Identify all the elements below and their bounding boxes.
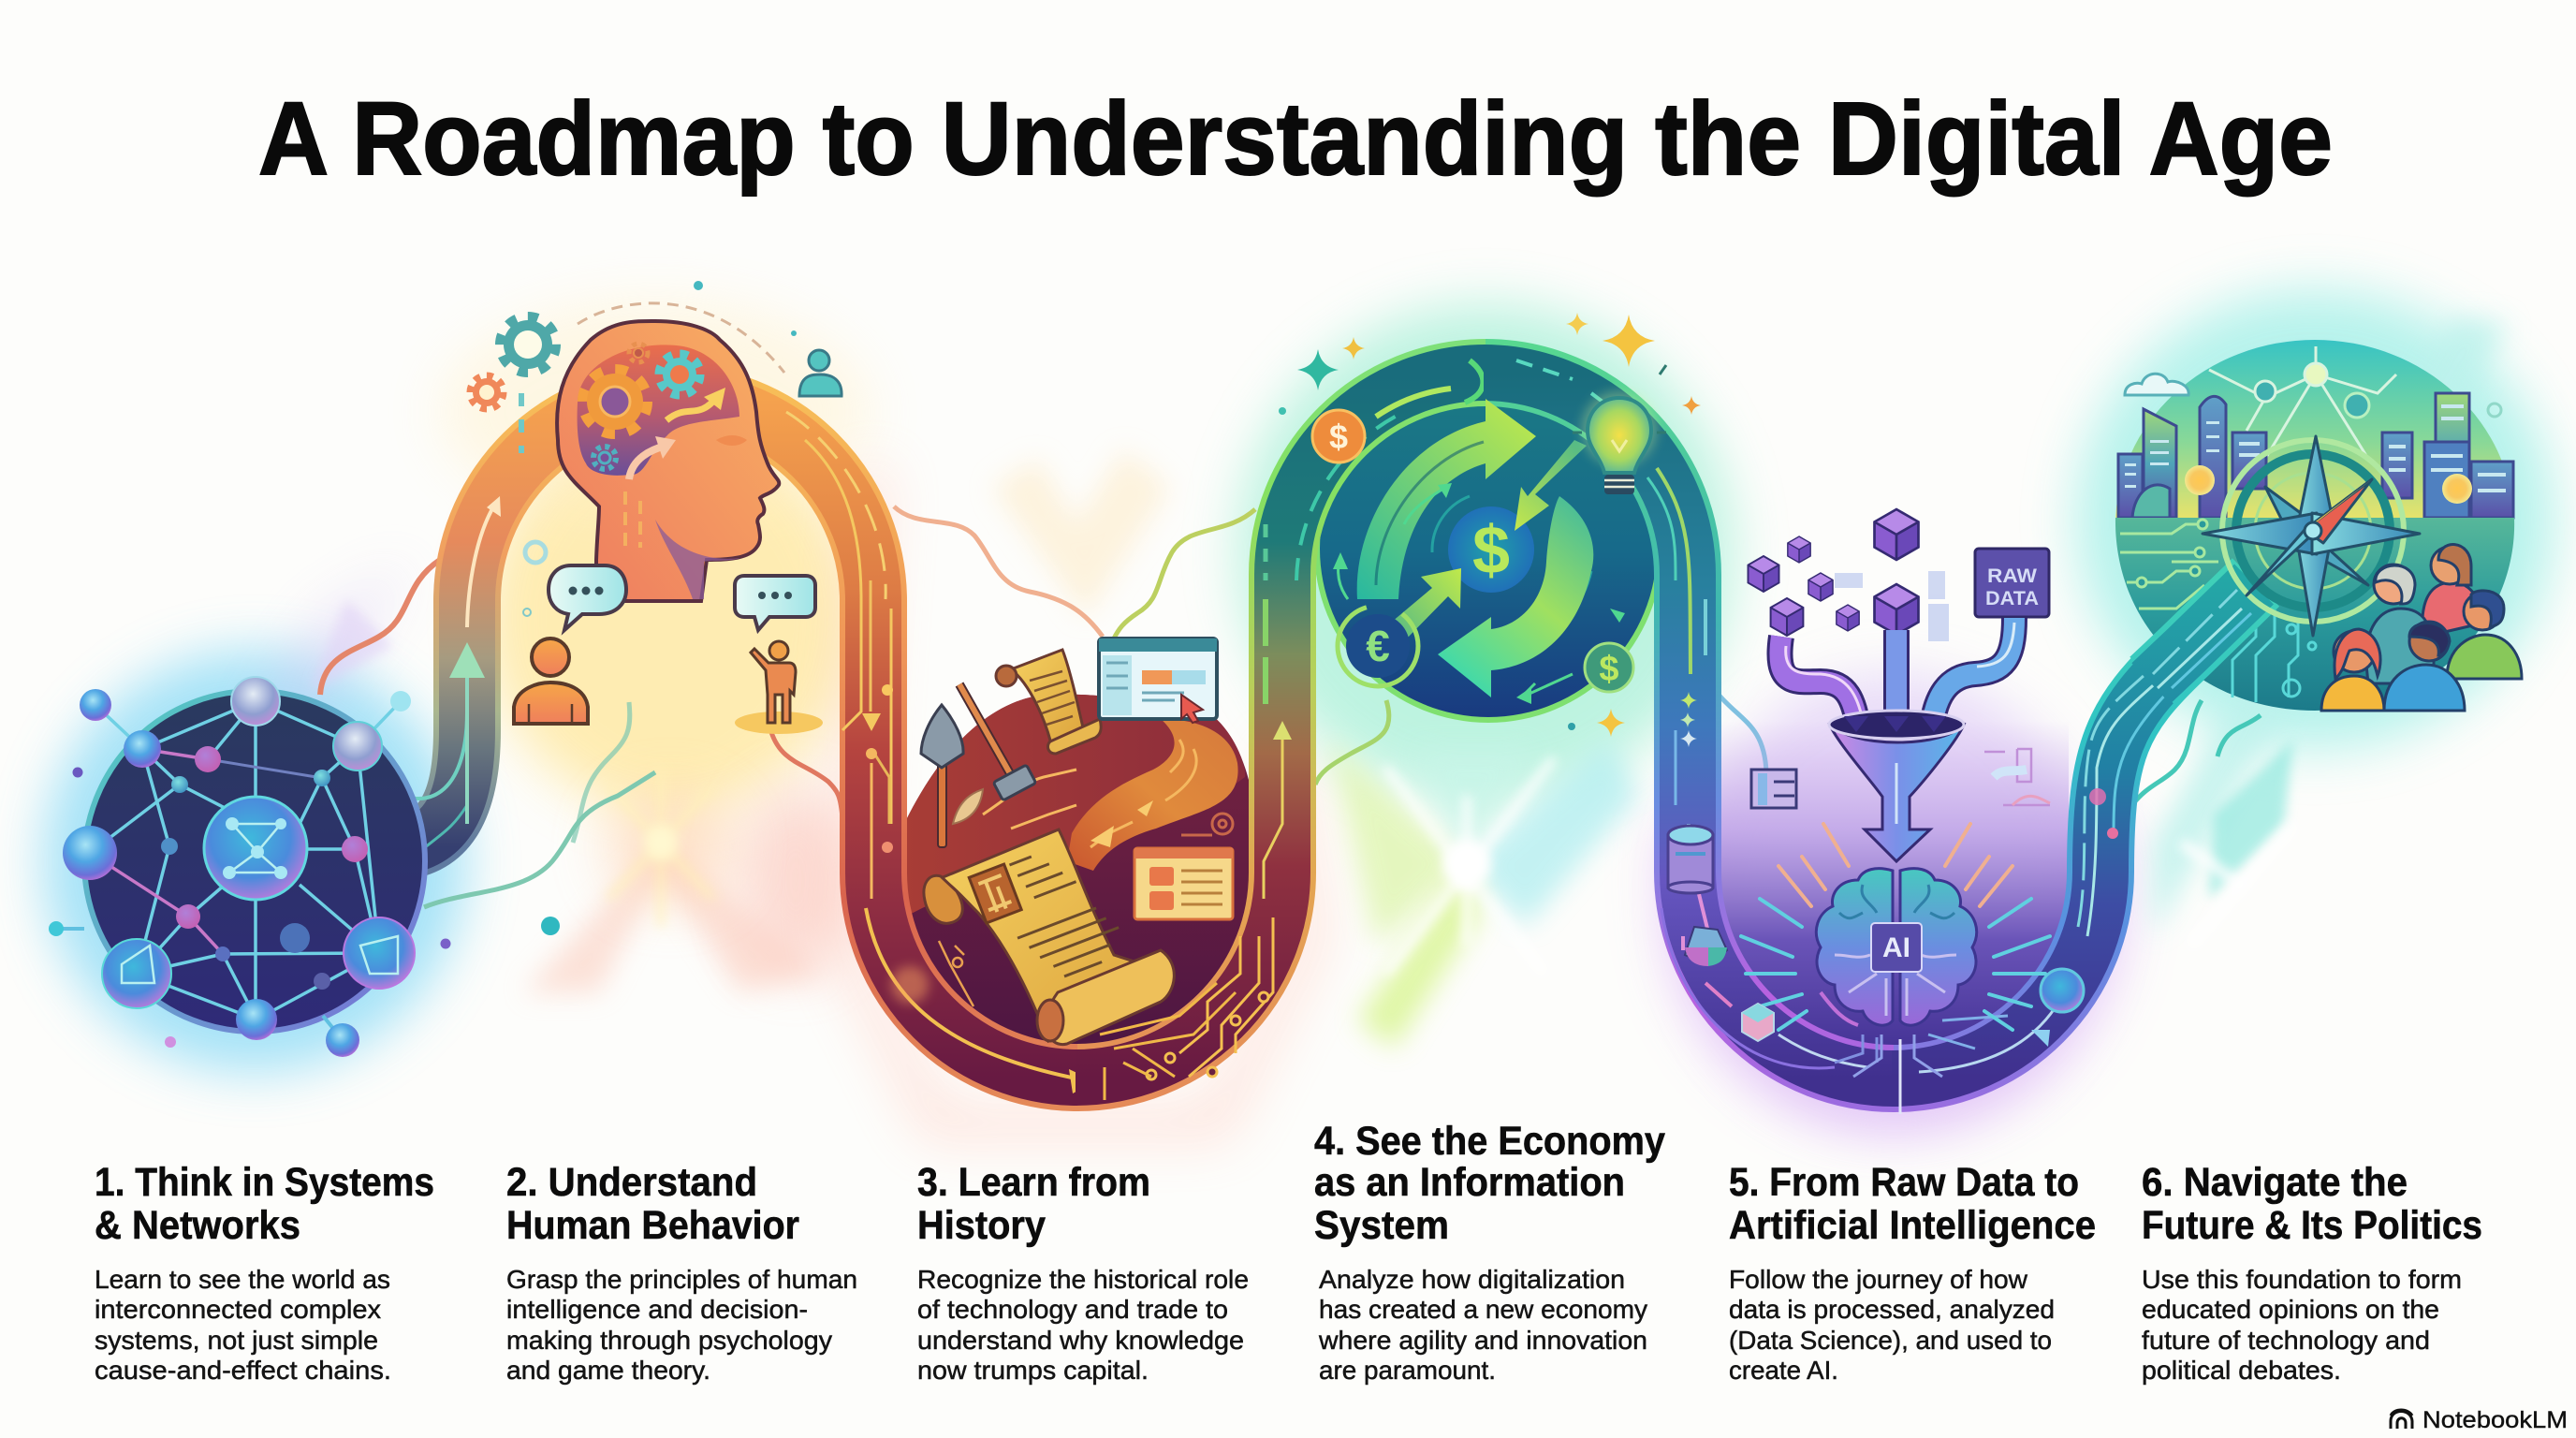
person: green shirt	[2447, 591, 2522, 679]
thin connector: road to compass	[2130, 700, 2261, 807]
gear: outside orange	[470, 375, 504, 409]
road: segment 5 rising out of data valley	[1853, 651, 2190, 1114]
step 2 text	[506, 1160, 857, 1385]
icon: small chart window	[1751, 770, 1796, 808]
body step 5: data is processed, analyzed	[1729, 1295, 2055, 1324]
gear: small teal	[593, 447, 616, 469]
scene sky	[2115, 340, 2514, 525]
thin connector: data road to chart	[1719, 695, 1766, 772]
thin connector: history road to economy circle	[1315, 700, 1389, 785]
interior: history landscape	[902, 695, 1252, 1048]
interior: data funnel backdrop	[1719, 721, 2069, 1047]
panel: network illustration	[49, 677, 560, 1057]
heading step 6: 6. Navigate the	[2142, 1160, 2408, 1205]
icon: database	[1668, 826, 1713, 893]
icon: AI brain: AI	[1882, 932, 1910, 963]
body step 6	[2142, 1265, 2462, 1385]
heading step 3: 3. Learn from	[917, 1160, 1150, 1205]
body step 4: where agility and innovation	[1318, 1326, 1647, 1355]
body step 3: understand why knowledge	[917, 1326, 1244, 1355]
gear: outside teal	[500, 316, 556, 373]
heading step 3	[917, 1160, 1150, 1248]
body step 3: of technology and trade to	[917, 1295, 1228, 1324]
person: grey hair	[2365, 565, 2434, 683]
panel: history illustration	[921, 638, 1233, 1045]
brain region	[578, 345, 739, 476]
icon: funnel	[1829, 711, 1965, 861]
icon: cubes	[1748, 509, 1949, 641]
arrow: from bulb	[1515, 440, 1587, 531]
economy circle	[1314, 374, 1662, 723]
arrow: lower diagonal	[1385, 568, 1461, 641]
body step 1: systems, not just simple	[95, 1326, 378, 1355]
inner node glyph	[122, 824, 398, 983]
icon: small window	[1134, 848, 1233, 919]
person icon top right	[799, 350, 842, 396]
road: segment 1 orange arch rising from network	[384, 398, 672, 866]
person: yellow shirt	[2321, 629, 2384, 711]
road: segment 2 descending to history valley	[668, 398, 1095, 1093]
dashed arc over head	[578, 303, 784, 373]
body step 3: now trumps capital.	[917, 1356, 1149, 1385]
icon: feather	[953, 789, 983, 824]
icon: small scroll	[996, 650, 1101, 754]
step 4 text	[1314, 1119, 1665, 1385]
heading step 2: Human Behavior	[506, 1203, 799, 1248]
body step 6: educated opinions on the	[2142, 1295, 2439, 1324]
step 6 text	[2142, 1160, 2482, 1385]
arrow: top curved	[1357, 399, 1536, 599]
label box: raw data: RAW	[1987, 565, 2037, 587]
heading step 1	[95, 1160, 434, 1248]
person left	[514, 638, 588, 724]
background glows and light flares	[44, 290, 2554, 1123]
figure right on disc	[735, 641, 823, 734]
heading step 2: 2. Understand	[506, 1160, 757, 1205]
icon: small chart right	[1984, 749, 2050, 805]
gear: small orange	[629, 344, 648, 362]
heading step 5: Artificial Intelligence	[1729, 1203, 2096, 1248]
heading step 5: 5. From Raw Data to	[1729, 1160, 2079, 1205]
coin: dollar orange: $	[1329, 418, 1348, 456]
heading step 6: Future & Its Politics	[2142, 1203, 2482, 1248]
panel: human behavior illustration	[470, 281, 842, 734]
heading step 3: History	[917, 1203, 1046, 1248]
road end entering compass scene	[2151, 582, 2256, 688]
center coin disc	[1448, 506, 1534, 593]
body step 2: making through psychology	[506, 1326, 832, 1355]
network links	[90, 701, 401, 1020]
coin: dollar green: $	[1599, 650, 1619, 689]
body step 1: Learn to see the world as	[95, 1265, 390, 1294]
heading step 5	[1729, 1160, 2096, 1248]
coin: euro: €	[1366, 622, 1390, 670]
step 3 text	[917, 1160, 1249, 1385]
thin connector: behaviour to history	[894, 506, 1103, 637]
city skyline	[2118, 393, 2513, 518]
network overlay	[2209, 346, 2501, 459]
icon: glowing orbs	[2185, 465, 2472, 504]
heading step 1: & Networks	[95, 1203, 300, 1248]
gear: teal in brain	[659, 354, 700, 395]
body step 5: Follow the journey of how	[1729, 1265, 2028, 1294]
heading step 2	[506, 1160, 799, 1248]
loose dots	[49, 768, 560, 1048]
thin connector: network to behaviour	[320, 560, 440, 695]
coin: euro	[1338, 606, 1418, 686]
compass star	[2203, 436, 2420, 636]
sparkle stack	[1680, 692, 1697, 747]
body step 2: and game theory.	[506, 1356, 710, 1385]
arrow in brain: pale	[629, 436, 676, 479]
body step 4: Analyze how digitalization	[1319, 1265, 1625, 1294]
small circulating arrows	[1339, 487, 1573, 697]
big scroll	[924, 829, 1174, 1045]
person: woman back right	[2422, 545, 2485, 637]
icon: shovel	[921, 705, 963, 847]
icon: browser window	[1099, 638, 1217, 723]
body step 6: Use this foundation to form	[2142, 1265, 2462, 1294]
body step 4: are paramount.	[1319, 1356, 1496, 1385]
body step 5	[1729, 1265, 2055, 1385]
body step 4: has created a new economy	[1319, 1295, 1647, 1324]
person: blue shirt	[2384, 622, 2465, 711]
network nodes	[80, 689, 111, 721]
body step 2	[506, 1265, 857, 1385]
panel: economy illustration	[1279, 313, 1701, 737]
heading step 6	[2142, 1160, 2482, 1248]
panel: future compass illustration	[2115, 340, 2522, 711]
body step 5: create AI.	[1729, 1356, 1838, 1385]
icon: AI brain	[1816, 869, 1977, 1025]
label box: raw data	[1975, 549, 2049, 617]
road: segment 4 economy arch descending to data valley	[1484, 360, 1895, 1078]
speech bubble left	[549, 565, 626, 630]
road: segment 3 rising to economy arch	[1076, 360, 1487, 1100]
head shading	[655, 520, 739, 599]
NotebookLM logo: NotebookLM	[2422, 1407, 2568, 1433]
body step 1: cause-and-effect chains.	[95, 1356, 391, 1385]
gear: large orange	[583, 370, 647, 433]
network disc	[84, 691, 425, 1032]
body step 5: (Data Science), and used to	[1729, 1326, 2052, 1355]
label box: raw data: DATA	[1985, 588, 2039, 609]
icon: hammer	[959, 684, 1036, 800]
sparkles	[1279, 313, 1701, 737]
panel: data to AI illustration	[1668, 509, 2050, 1041]
heading step 4: as an Information	[1314, 1160, 1625, 1205]
body step 6: political debates.	[2142, 1356, 2341, 1385]
icon: light bulb	[1573, 365, 1666, 494]
center coin disc: $	[1472, 513, 1510, 588]
head silhouette	[557, 321, 779, 601]
body step 1	[95, 1265, 391, 1385]
body step 2: intelligence and decision-	[506, 1295, 808, 1324]
ground with circuit	[2115, 518, 2514, 711]
body step 2: Grasp the principles of human	[506, 1265, 857, 1294]
heading step 4: 4. See the Economy	[1314, 1119, 1665, 1164]
arrow in brain: yellow	[666, 388, 725, 420]
step 5 text	[1729, 1160, 2096, 1385]
radiating lines	[1741, 824, 2050, 1030]
pipes into funnel	[1779, 618, 2014, 726]
body step 3	[917, 1265, 1249, 1385]
icon: small cube on road	[1742, 1004, 1774, 1041]
title: A Roadmap to Understanding the Digital Age	[258, 81, 2333, 197]
compass ring	[2222, 440, 2404, 622]
coin: dollar green	[1585, 643, 1633, 692]
body step 1: interconnected complex	[95, 1295, 381, 1324]
body step 3: Recognize the historical role	[917, 1265, 1249, 1294]
body step 6: future of technology and	[2142, 1326, 2430, 1355]
speech bubble right	[735, 576, 815, 630]
people group	[2321, 545, 2522, 711]
thin connector: network to behaviour lower	[424, 702, 655, 907]
arrow: bottom curved	[1438, 496, 1593, 697]
body step 4	[1318, 1265, 1647, 1385]
icon: NotebookLM	[2391, 1410, 2412, 1429]
step 1 text	[95, 1160, 434, 1385]
heading step 1: 1. Think in Systems	[95, 1160, 434, 1205]
heading step 4	[1314, 1119, 1665, 1248]
winding orange road	[1067, 719, 1238, 871]
coin: dollar orange	[1312, 410, 1365, 462]
thin connector: history to economy	[1114, 509, 1255, 638]
icon: cloud	[2125, 374, 2188, 395]
heading step 4: System	[1314, 1203, 1449, 1248]
icon: cluster on road	[1685, 927, 1727, 966]
icon: target ring	[1181, 814, 1233, 835]
thin connector: figure to history road	[771, 732, 842, 818]
